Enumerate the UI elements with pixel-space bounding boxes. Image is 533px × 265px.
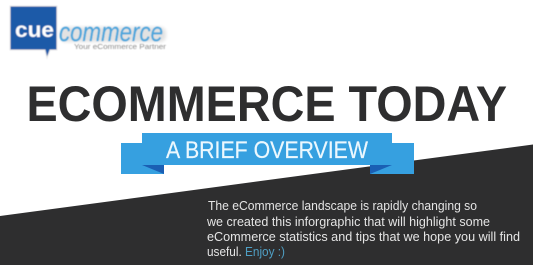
line 3: eCommerce statistics and tips that we hope you will find <box>207 229 520 244</box>
line 1: The eCommerce landscape is rapidly changing so <box>208 198 477 213</box>
logo glow <box>60 27 166 42</box>
ribbon right wing <box>370 143 414 174</box>
icon: speech bubble <box>10 6 57 58</box>
logo: cuecommerce <box>10 6 167 58</box>
line 4: useful. Enjoy :) <box>207 244 285 259</box>
ribbon main band <box>142 133 392 165</box>
ribbon fold right <box>370 165 392 174</box>
logo word: cue: cue <box>15 19 54 42</box>
ribbon banner <box>121 133 414 174</box>
logo word: commerce: commerce <box>59 17 163 47</box>
ribbon text: A BRIEF OVERVIEW <box>166 137 368 164</box>
dark diagonal panel <box>0 144 533 265</box>
logo tagline: Your eCommerce Partner <box>74 44 167 51</box>
line 2: we created this inforgraphic that will highlight some <box>206 214 490 229</box>
ribbon left wing <box>121 143 164 174</box>
intro text <box>206 198 520 259</box>
title: ECOMMERCE TODAY <box>26 76 507 132</box>
ribbon fold left <box>142 165 164 174</box>
